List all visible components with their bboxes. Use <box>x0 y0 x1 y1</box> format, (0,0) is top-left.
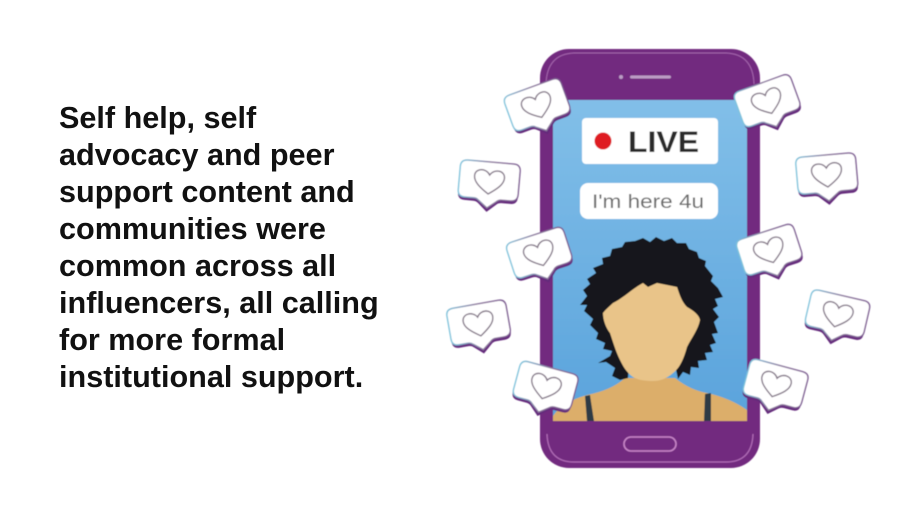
comment badge: I'm here 4u <box>592 192 704 213</box>
comment badge <box>580 183 718 219</box>
phone speaker <box>619 75 671 79</box>
heart bubble 7 <box>446 299 514 359</box>
live badge: LIVE <box>628 126 699 159</box>
text block: main statement: influencers, all calling <box>59 286 379 320</box>
heart bubble 3 <box>457 159 521 215</box>
person <box>553 237 747 421</box>
text block: main statement: for more formal <box>59 323 285 357</box>
text block: main statement: institutional support. <box>59 360 363 394</box>
heart bubble 1 <box>503 77 576 145</box>
text block: main statement: advocacy and peer <box>59 138 334 172</box>
shoulders <box>553 378 747 421</box>
heart bubble 5 <box>505 226 577 292</box>
top straps <box>585 393 711 421</box>
text block: main statement: Self help, self <box>59 101 256 135</box>
heart bubble 6 <box>735 223 807 289</box>
heart bubble 4 <box>795 152 859 208</box>
text block: main statement <box>59 101 379 394</box>
text block: main statement: common across all <box>59 249 336 283</box>
heart bubble 8 <box>801 289 871 351</box>
text block: main statement: support content and <box>59 175 355 209</box>
heart bubbles <box>446 73 871 424</box>
heart bubble 9 <box>509 360 579 424</box>
text block: main statement: communities were <box>59 212 326 246</box>
heart bubble 2 <box>733 73 806 141</box>
hair <box>580 237 723 380</box>
heart bubble 10 <box>739 358 809 422</box>
live badge <box>582 118 718 164</box>
face <box>603 283 700 381</box>
phone screen <box>553 100 747 421</box>
phone body <box>540 49 760 468</box>
phone home button <box>624 437 676 451</box>
